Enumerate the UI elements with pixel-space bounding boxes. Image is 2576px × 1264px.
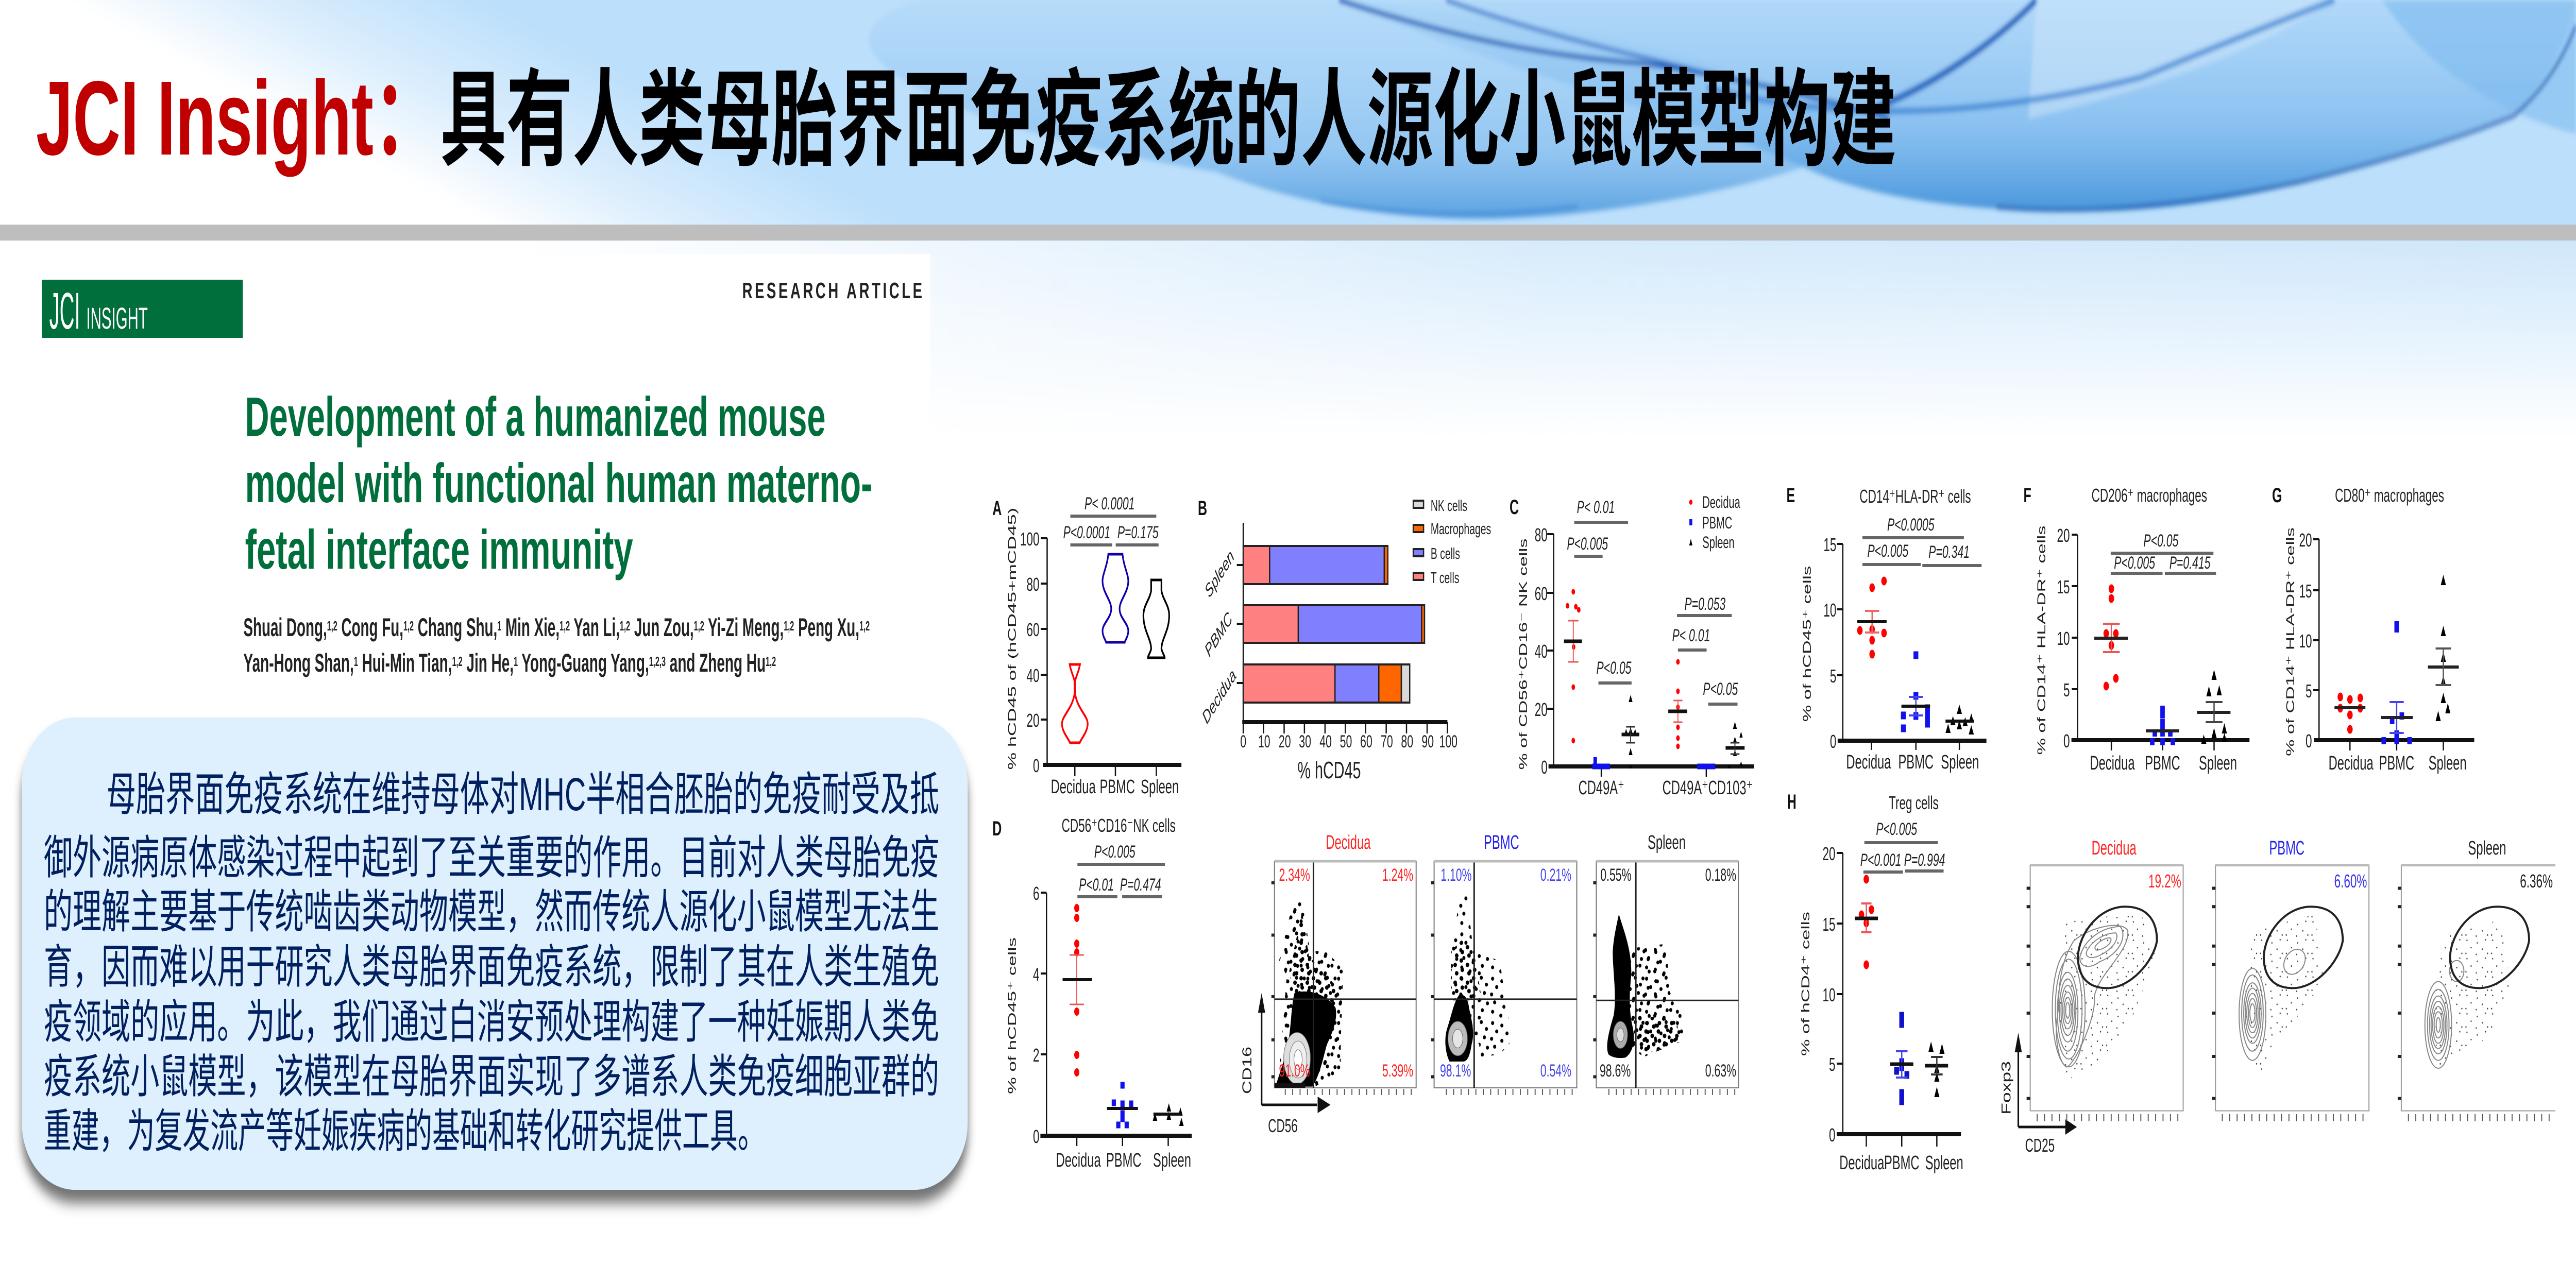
y axis label: % hCD45 of (hCD45+mCD45) bbox=[1006, 508, 1019, 770]
significance: P< 0.01 bbox=[1577, 498, 1615, 517]
violin: spleen bbox=[1143, 580, 1169, 658]
panel C: scatter plot NK cells: 20 bbox=[1535, 700, 1548, 720]
authors bbox=[243, 612, 870, 677]
panel G: scatter CD80 macrophages: 15 bbox=[2299, 582, 2312, 602]
significance: P<0.005 bbox=[1567, 534, 1608, 554]
panel F: scatter CD206 macrophages bbox=[2024, 484, 2249, 774]
data points bbox=[1564, 592, 1744, 768]
panel G: scatter CD80 macrophages: 5 bbox=[2306, 681, 2312, 702]
legend: PBMC bbox=[1702, 514, 1732, 532]
panel B: stacked bar chart: 70 bbox=[1381, 732, 1393, 751]
flow cytometry: Foxp3 vs CD25: Foxp3 bbox=[1999, 1061, 2013, 1115]
gate percentages: 6.60% bbox=[2334, 872, 2367, 892]
legend: Spleen bbox=[1702, 533, 1735, 552]
journal logo: JCI bbox=[49, 282, 80, 340]
significance bbox=[2111, 531, 2216, 573]
panel E: scatter CD14 HLA-DR bbox=[1787, 484, 1987, 773]
panel G: scatter CD80 macrophages: CD80⁺ macrophages bbox=[2335, 486, 2444, 506]
panel E: scatter CD14 HLA-DR: Spleen bbox=[1941, 750, 1979, 773]
panel G: scatter CD80 macrophages: Spleen bbox=[2429, 751, 2467, 774]
panel B: stacked bar chart: 10 bbox=[1258, 732, 1270, 751]
authors: Yan-Hong Shan,1 Hui-Min Tian,1,2 Jin He,1 Yong-Guang Yang,1,2,3 and Zheng Hu1,2 bbox=[243, 648, 776, 677]
panel G: scatter CD80 macrophages: % of CD14⁺ HLA-DR⁺ cells bbox=[2284, 527, 2297, 756]
panel F: scatter CD206 macrophages: 15 bbox=[2057, 577, 2070, 597]
title: 具有人类母胎界面免疫系统的人源化小鼠模型构建 bbox=[440, 61, 1896, 179]
panel F: scatter CD206 macrophages: CD206⁺ macrophages bbox=[2092, 486, 2207, 506]
panel D: scatter CD56 CD16 NK cells: % of hCD45⁺ cells bbox=[1006, 937, 1019, 1094]
panel C: scatter plot NK cells: 80 bbox=[1535, 525, 1548, 545]
significance: P=0.175 bbox=[1117, 523, 1159, 542]
significance: P< 0.01 bbox=[1672, 626, 1710, 645]
significance: P=0.053 bbox=[1685, 594, 1725, 614]
gate percentages: 2.34% bbox=[1279, 865, 1310, 885]
panel C: scatter plot NK cells: CD49A⁺ bbox=[1579, 776, 1624, 798]
flow cytometry: Foxp3 vs CD25: PBMC bbox=[2269, 836, 2304, 859]
panel H: scatter Treg cells: Spleen bbox=[1925, 1151, 1963, 1173]
panel E: scatter CD14 HLA-DR: Decidua bbox=[1846, 750, 1891, 773]
gate percentages: 0.54% bbox=[1540, 1061, 1571, 1081]
callout: summary text: 疫系统小鼠模型，该模型在母胎界面实现了多谱系人类免疫细胞亚群的 bbox=[44, 1050, 939, 1102]
gate percentages: 1.10% bbox=[1440, 865, 1471, 885]
data points bbox=[2334, 575, 2459, 741]
bars: PBMC bbox=[1243, 605, 1425, 643]
banner background with blue swooshes bbox=[0, 0, 2576, 225]
significance: P<0.001 bbox=[1860, 850, 1901, 870]
panel E: scatter CD14 HLA-DR: 5 bbox=[1830, 667, 1836, 687]
panel F: scatter CD206 macrophages: 10 bbox=[2057, 629, 2070, 649]
panel G: scatter CD80 macrophages: PBMC bbox=[2379, 751, 2414, 774]
gate percentages: 0.18% bbox=[1705, 865, 1736, 885]
research article tag: RESEARCH ARTICLE bbox=[742, 278, 922, 303]
callout: summary text: 疫领域的应用。为此，我们通过白消安预处理构建了一种妊娠期人类免 bbox=[44, 996, 939, 1048]
panel G: scatter CD80 macrophages bbox=[2272, 484, 2474, 774]
panel B: stacked bar chart bbox=[1198, 497, 1491, 784]
significance: P<0.05 bbox=[1703, 679, 1738, 699]
significance: P<0.0005 bbox=[1887, 515, 1935, 535]
panel A: violin plot: 80 bbox=[1026, 575, 1039, 595]
flow cytometry: Foxp3 vs CD25 bbox=[1999, 836, 2555, 1156]
panel C: scatter plot NK cells: 60 bbox=[1535, 584, 1548, 604]
panel A: violin plot: Decidua bbox=[1051, 775, 1096, 797]
panel G: scatter CD80 macrophages: Decidua bbox=[2329, 751, 2374, 774]
panel F: scatter CD206 macrophages: F bbox=[2024, 484, 2031, 507]
category labels bbox=[1200, 546, 1239, 728]
panel D: scatter CD56 CD16 NK cells: Decidua bbox=[1056, 1149, 1101, 1171]
axis tick rugs bbox=[2037, 1114, 2553, 1121]
panel E: scatter CD14 HLA-DR: % of hCD45⁺ cells bbox=[1801, 566, 1814, 722]
contour plots bbox=[2027, 865, 2555, 1111]
callout: summary text bbox=[22, 718, 968, 1190]
panel E: scatter CD14 HLA-DR: 15 bbox=[1823, 535, 1836, 555]
panel B: stacked bar chart: % hCD45 bbox=[1297, 757, 1361, 784]
journal logo bbox=[42, 280, 243, 340]
bars: spleen bbox=[1243, 546, 1388, 584]
plot clouds bbox=[1272, 861, 1738, 1088]
flow cytometry: CD16 vs CD56: CD16 bbox=[1240, 1047, 1255, 1094]
paper title bbox=[245, 386, 872, 581]
panel B: stacked bar chart: 80 bbox=[1401, 732, 1413, 751]
panel H: scatter Treg cells: 20 bbox=[1822, 844, 1836, 864]
flow cytometry: Foxp3 vs CD25: Decidua bbox=[2092, 836, 2137, 859]
flow cytometry: CD16 vs CD56: PBMC bbox=[1484, 831, 1519, 853]
panel C: scatter plot NK cells: 40 bbox=[1535, 642, 1548, 662]
gate percentages: 0.55% bbox=[1600, 865, 1631, 885]
gate percentages: 5.39% bbox=[1382, 1061, 1413, 1081]
panel E: scatter CD14 HLA-DR: E bbox=[1787, 484, 1795, 507]
axis arrows bbox=[1258, 993, 1330, 1113]
category labels: Spleen bbox=[1202, 546, 1237, 602]
panel F: scatter CD206 macrophages: 5 bbox=[2063, 680, 2070, 701]
panel H: scatter Treg cells: PBMC bbox=[1884, 1151, 1920, 1173]
panel B: stacked bar chart: 50 bbox=[1340, 732, 1352, 751]
panel B: stacked bar chart: 90 bbox=[1421, 732, 1434, 751]
panel A: violin plot: 20 bbox=[1026, 711, 1039, 731]
panel H: scatter Treg cells: 0 bbox=[1829, 1125, 1835, 1146]
panel D: scatter CD56 CD16 NK cells: 4 bbox=[1033, 965, 1039, 985]
panel D: scatter CD56 CD16 NK cells: D bbox=[992, 817, 1002, 841]
significance: P<0.0001 bbox=[1063, 523, 1110, 542]
panel B: stacked bar chart: 100 bbox=[1439, 732, 1458, 751]
panel E: scatter CD14 HLA-DR: CD14⁺HLA-DR⁺ cells bbox=[1859, 487, 1971, 507]
panel H: scatter Treg cells: H bbox=[1787, 791, 1797, 814]
legend bbox=[1413, 498, 1491, 587]
gate percentages: 0.21% bbox=[1540, 865, 1571, 885]
gate percentages bbox=[2148, 872, 2553, 892]
panel: article header bbox=[0, 254, 930, 718]
callout: summary text: 育，因而难以用于研究人类母胎界面免疫系统，限制了其在人类生殖免 bbox=[44, 941, 939, 993]
significance: P<0.005 bbox=[2114, 553, 2155, 573]
panel D: scatter CD56 CD16 NK cells: Spleen bbox=[1153, 1149, 1191, 1171]
legend: T cells bbox=[1431, 570, 1459, 587]
significance: P<0.05 bbox=[1597, 658, 1632, 678]
panel H: scatter Treg cells: % of hCD4⁺ cells bbox=[1799, 912, 1812, 1056]
panel C: scatter plot NK cells: % of CD56⁺CD16⁻ NK cells bbox=[1517, 539, 1530, 770]
panel F: scatter CD206 macrophages: 20 bbox=[2057, 526, 2070, 546]
panel D: scatter CD56 CD16 NK cells: 2 bbox=[1033, 1046, 1039, 1066]
flow cytometry: CD16 vs CD56: Spleen bbox=[1648, 831, 1686, 853]
category labels: PBMC bbox=[1202, 608, 1235, 661]
panel H: scatter Treg cells: 5 bbox=[1829, 1055, 1835, 1075]
callout: summary text: 重建，为复发流产等妊娠疾病的基础和转化研究提供工具。 bbox=[44, 1105, 766, 1157]
panel F: scatter CD206 macrophages: % of CD14⁺ HLA-DR⁺ cells bbox=[2036, 525, 2048, 755]
panel H: scatter Treg cells: 15 bbox=[1822, 915, 1836, 935]
violin: decidua bbox=[1062, 664, 1088, 743]
significance bbox=[1862, 515, 1981, 566]
panel H: scatter Treg cells: 10 bbox=[1822, 985, 1836, 1005]
panel G: scatter CD80 macrophages: 0 bbox=[2306, 731, 2312, 751]
data points bbox=[1062, 908, 1184, 1126]
legend bbox=[1689, 493, 1740, 552]
flow cytometry: Foxp3 vs CD25: CD25 bbox=[2025, 1136, 2055, 1156]
paper title: fetal interface immunity bbox=[245, 519, 633, 581]
panel D: scatter CD56 CD16 NK cells: PBMC bbox=[1106, 1149, 1142, 1171]
data points bbox=[1857, 581, 1974, 735]
gate percentages: 0.63% bbox=[1705, 1061, 1736, 1081]
grey divider bar bbox=[0, 225, 2576, 241]
panel H: scatter Treg cells: Decidua bbox=[1839, 1151, 1885, 1173]
panel A: violin plot: 40 bbox=[1026, 666, 1039, 686]
panel G: scatter CD80 macrophages: 10 bbox=[2299, 631, 2312, 652]
gate percentages: 98.1% bbox=[1440, 1061, 1471, 1081]
panel B: stacked bar chart: B bbox=[1198, 497, 1207, 520]
panel A: violin plot: 0 bbox=[1033, 756, 1039, 776]
panel F: scatter CD206 macrophages: PBMC bbox=[2145, 751, 2180, 774]
panel A: violin plot: 60 bbox=[1026, 620, 1039, 640]
panel C: scatter plot NK cells: C bbox=[1510, 496, 1519, 519]
gate percentages bbox=[1279, 865, 1736, 1081]
panel B: stacked bar chart: 30 bbox=[1299, 732, 1311, 751]
significance: P<0.005 bbox=[1094, 842, 1136, 862]
gate percentages: 98.6% bbox=[1600, 1061, 1631, 1081]
panel F: scatter CD206 macrophages: 0 bbox=[2063, 731, 2070, 751]
legend: B cells bbox=[1431, 545, 1460, 562]
paper title: Development of a humanized mouse bbox=[245, 386, 825, 448]
callout: summary text: 御外源病原体感染过程中起到了至关重要的作用。目前对人类母胎免疫 bbox=[44, 831, 939, 883]
panel A: violin plot: PBMC bbox=[1099, 775, 1135, 797]
axis arrows bbox=[2015, 1033, 2077, 1135]
significance: P<0.005 bbox=[1876, 819, 1917, 839]
journal logo: INSIGHT bbox=[87, 302, 148, 335]
flow cytometry: Foxp3 vs CD25: Spleen bbox=[2468, 836, 2506, 859]
significance: P<0.005 bbox=[1868, 541, 1908, 561]
panel B: stacked bar chart: 0 bbox=[1240, 732, 1246, 751]
legend: Macrophages bbox=[1431, 521, 1491, 538]
panel G: scatter CD80 macrophages: 20 bbox=[2299, 531, 2312, 551]
gates bbox=[2078, 907, 2529, 988]
panel D: scatter CD56 CD16 NK cells: 0 bbox=[1033, 1127, 1039, 1147]
title: JCI Insight： bbox=[36, 59, 439, 177]
significance: P=0.474 bbox=[1120, 875, 1161, 895]
violin: PBMC bbox=[1103, 554, 1128, 642]
legend: Decidua bbox=[1702, 493, 1740, 511]
significance: P=0.341 bbox=[1928, 542, 1970, 562]
significance: P=0.415 bbox=[2170, 553, 2211, 573]
panel A: violin plot bbox=[992, 494, 1181, 797]
significance: P=0.994 bbox=[1904, 850, 1945, 870]
panel A: violin plot: 100 bbox=[1020, 529, 1039, 550]
panel E: scatter CD14 HLA-DR: PBMC bbox=[1898, 750, 1934, 773]
gate percentages: 91.0% bbox=[1279, 1061, 1310, 1081]
significance: P<0.05 bbox=[2143, 531, 2179, 551]
flow cytometry: CD16 vs CD56: CD56 bbox=[1268, 1116, 1298, 1136]
panel H: scatter Treg cells: Treg cells bbox=[1889, 793, 1939, 813]
bars: decidua bbox=[1243, 664, 1410, 703]
paper title: model with functional human materno- bbox=[245, 452, 872, 515]
data points bbox=[2094, 589, 2230, 744]
gate percentages: 19.2% bbox=[2148, 872, 2181, 892]
panel C: scatter plot NK cells: 0 bbox=[1541, 758, 1548, 778]
panel G: scatter CD80 macrophages: G bbox=[2272, 484, 2282, 507]
legend: NK cells bbox=[1431, 498, 1467, 515]
panel B: stacked bar chart: 60 bbox=[1360, 732, 1372, 751]
gate percentages: 6.36% bbox=[2520, 872, 2553, 892]
panel F: scatter CD206 macrophages: Decidua bbox=[2090, 751, 2135, 774]
significance bbox=[1860, 819, 1945, 872]
panel E: scatter CD14 HLA-DR: 0 bbox=[1830, 732, 1836, 752]
axis tick rugs bbox=[1285, 1089, 1737, 1095]
panel A: violin plot: Spleen bbox=[1141, 775, 1179, 797]
panel D: scatter CD56 CD16 NK cells: CD56⁺CD16⁻NK cells bbox=[1062, 816, 1176, 836]
significance bbox=[1077, 842, 1165, 897]
panel F: scatter CD206 macrophages: Spleen bbox=[2199, 751, 2237, 774]
panel B: stacked bar chart: 20 bbox=[1279, 732, 1291, 751]
panel E: scatter CD14 HLA-DR: 10 bbox=[1823, 601, 1836, 621]
callout: summary text: 母胎界面免疫系统在维持母体对MHC半相合胚胎的免疫耐受及抵 bbox=[107, 768, 939, 820]
panel D: scatter CD56 CD16 NK cells bbox=[992, 816, 1192, 1171]
panel B: stacked bar chart: 40 bbox=[1319, 732, 1332, 751]
panel C: scatter plot NK cells: CD49A⁺CD103⁺ bbox=[1663, 776, 1753, 798]
significance bbox=[1567, 498, 1738, 704]
significance: P< 0.0001 bbox=[1084, 494, 1134, 514]
significance bbox=[1063, 494, 1159, 545]
panel C: scatter plot NK cells bbox=[1510, 493, 1754, 798]
panel A: violin plot: A bbox=[992, 497, 1002, 520]
flow cytometry: CD16 vs CD56: Decidua bbox=[1326, 831, 1371, 853]
panel D: scatter CD56 CD16 NK cells: 6 bbox=[1033, 884, 1039, 904]
data points bbox=[1855, 879, 1948, 1101]
flow cytometry: CD16 vs CD56 bbox=[1240, 831, 1738, 1136]
category labels: Decidua bbox=[1200, 665, 1239, 728]
authors: Shuai Dong,1,2 Cong Fu,1,2 Chang Shu,1 Min Xie,1,2 Yan Li,1,2 Jun Zou,1,2 Yi-Zi Meng,1,2 Peng Xu,1,2 bbox=[243, 612, 870, 642]
gate percentages: 1.24% bbox=[1382, 865, 1413, 885]
significance: P<0.01 bbox=[1079, 875, 1114, 895]
panel H: scatter Treg cells bbox=[1787, 791, 1963, 1173]
callout: summary text: 的理解主要基于传统啮齿类动物模型，然而传统人源化小鼠模型无法生 bbox=[44, 885, 939, 937]
